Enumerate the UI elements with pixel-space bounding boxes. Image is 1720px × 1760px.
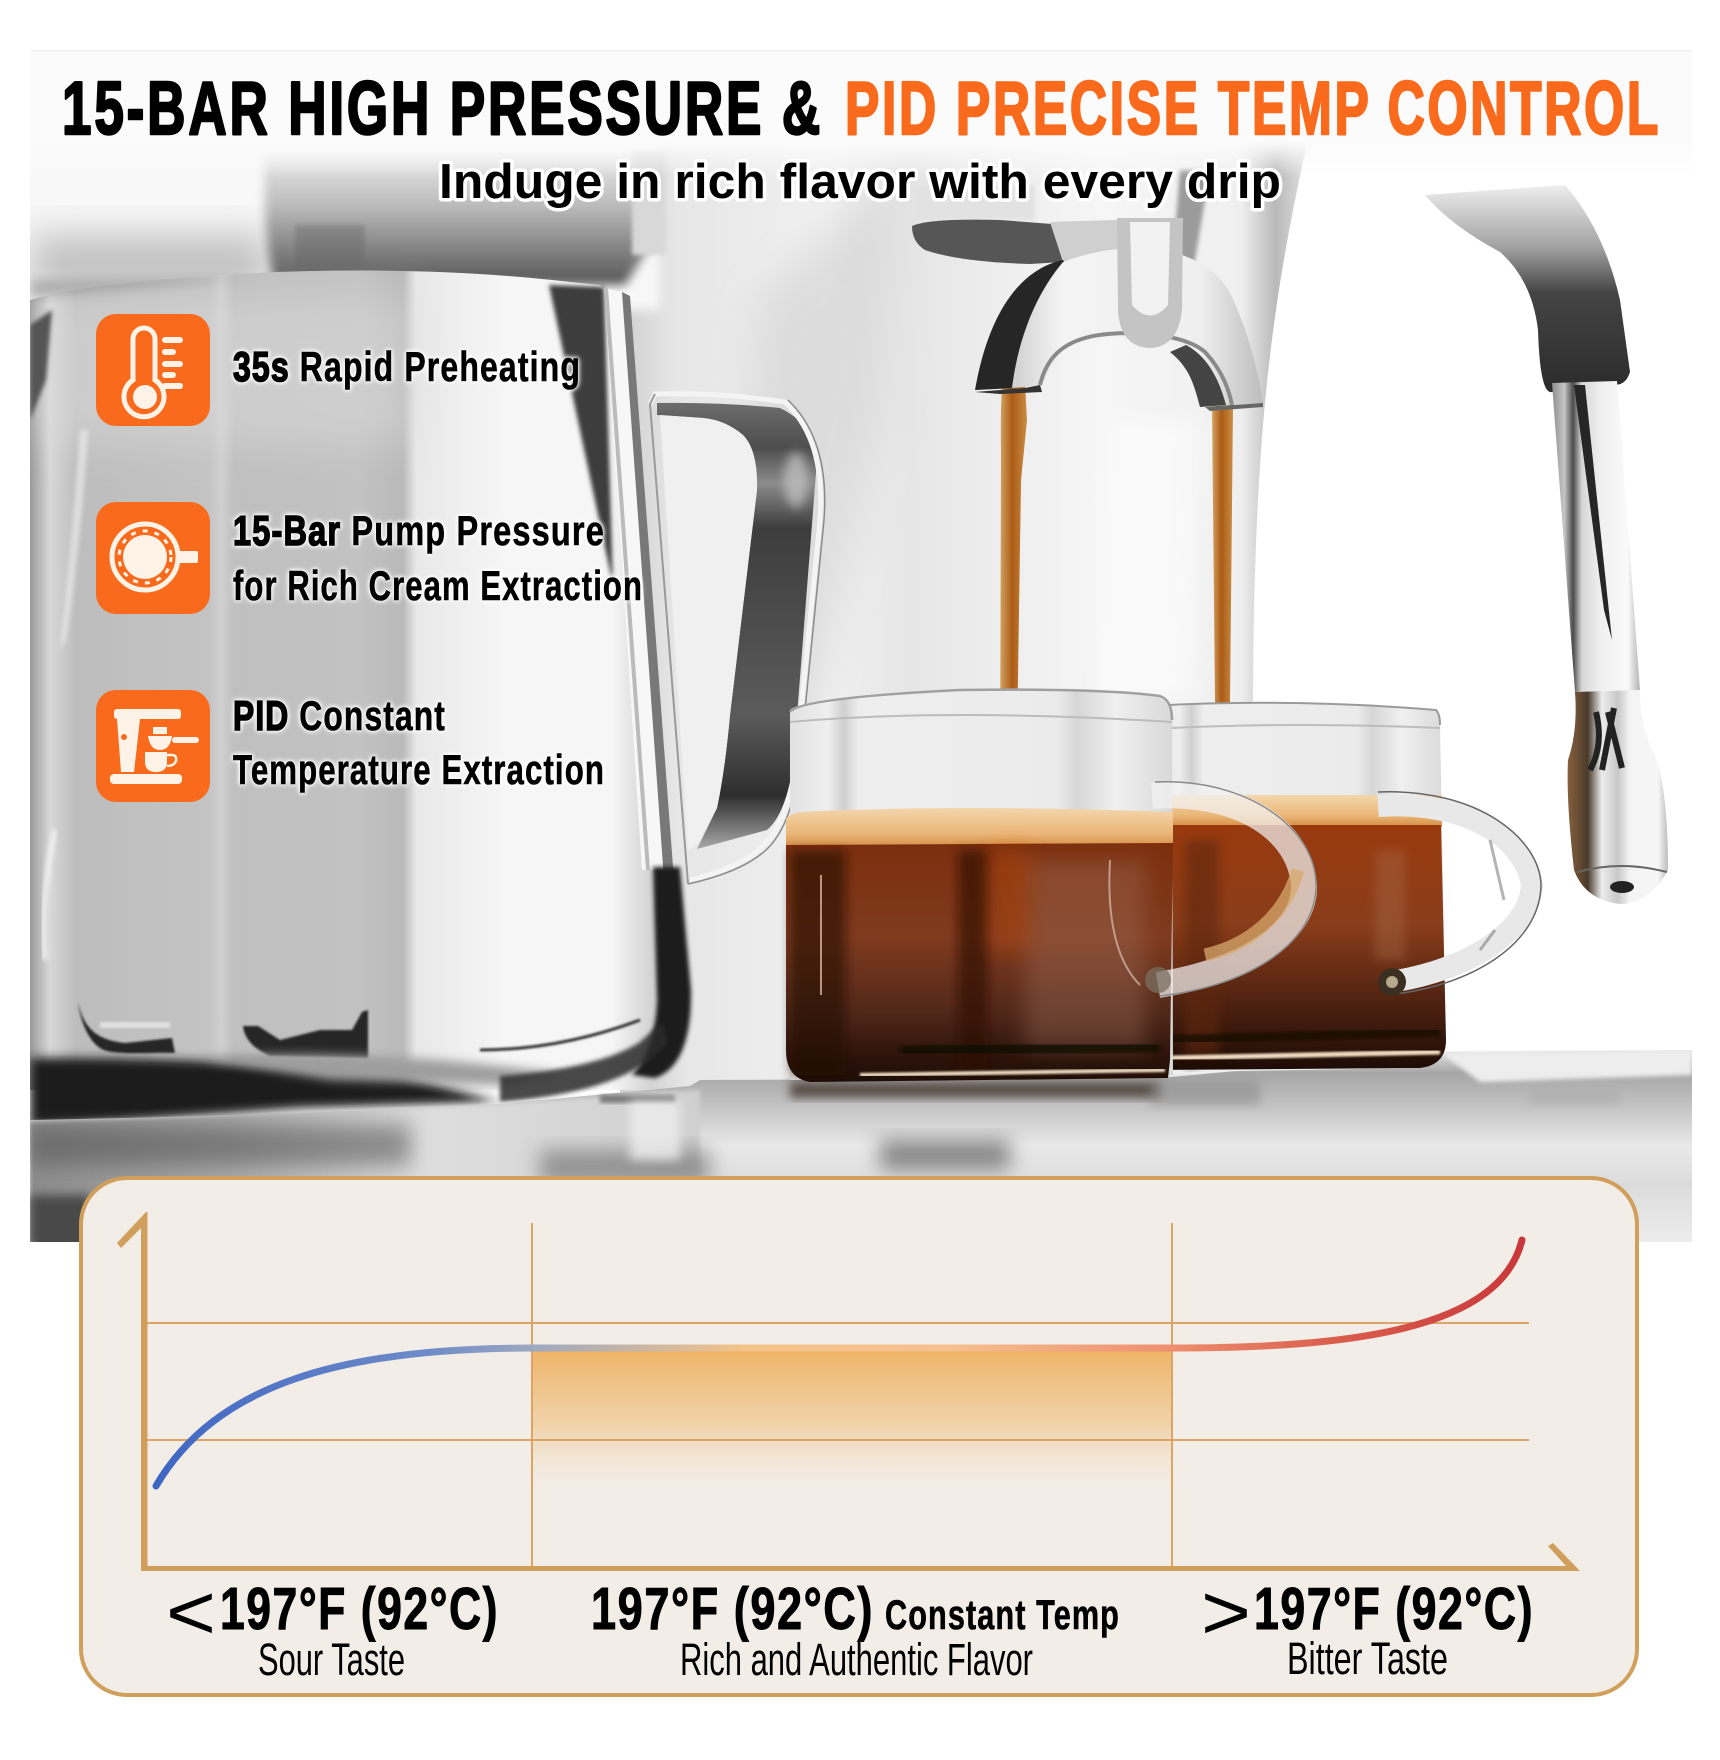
portafilter handle and spout [912,185,1263,411]
milk pitcher body [30,271,691,1128]
top white title band [268,130,1309,174]
label: below 197F: Sour Taste [258,1634,405,1685]
label: below 197F [166,1568,499,1685]
chart: temperature curve [156,1240,1522,1486]
label: above 197F: > [1201,1568,1251,1656]
feature: pump pressure [96,502,643,614]
label: constant 197F: 197°F (92°C) [591,1576,874,1642]
subtitle: Induge in rich flavor with every drip [439,155,1281,209]
photo: espresso machine pouring into two glass cups [20,50,1700,1255]
coffee streams [1000,386,1233,702]
icon: espresso machine [96,690,210,802]
pitcher reflections at base [78,1002,368,1058]
front glass cup [786,690,1173,1082]
feature text [233,507,643,609]
back cup handle [1378,792,1541,996]
upper left machine body [30,151,665,314]
label: constant 197F [591,1576,1120,1685]
feature text: Temperature Extraction [233,746,605,793]
label: above 197F [1201,1568,1534,1684]
label: constant 197F: Rich and Authentic Flavor [680,1634,1033,1685]
front cup handle [1109,782,1316,996]
feature text: 15-Bar Pump Pressure [233,507,605,554]
steam wand rubber sleeve [1425,185,1630,392]
feature text: for Rich Cream Extraction [233,562,643,609]
machine back panel [620,130,1310,1100]
feature text: 35s Rapid Preheating [233,343,581,390]
pitcher handle [650,394,825,884]
title [62,66,1661,150]
label: below 197F: 197°F (92°C) [220,1576,499,1642]
feature: PID constant temperature [96,690,605,802]
back glass cup [1150,703,1446,1072]
feature: rapid preheating [96,314,581,426]
feature text [233,692,605,793]
counter surface [30,1050,1692,1242]
chart: constant temperature band [532,1351,1172,1499]
chart: grid lines [146,1223,1529,1568]
icon: thermometer [96,314,210,426]
steam wand chrome tube [1552,381,1668,904]
title: black part: 15-BAR HIGH PRESSURE & [62,66,823,150]
panel: temperature chart [81,1178,1637,1695]
icon: coffee cup top view [96,502,210,614]
label: above 197F: 197°F (92°C) [1254,1576,1534,1642]
label: below 197F: < [166,1568,216,1656]
label: above 197F: Bitter Taste [1287,1633,1448,1684]
feature text: PID Constant [233,692,446,739]
label: constant 197F: Constant Temp [885,1591,1120,1638]
chart: axes with arrows [117,1212,1580,1571]
